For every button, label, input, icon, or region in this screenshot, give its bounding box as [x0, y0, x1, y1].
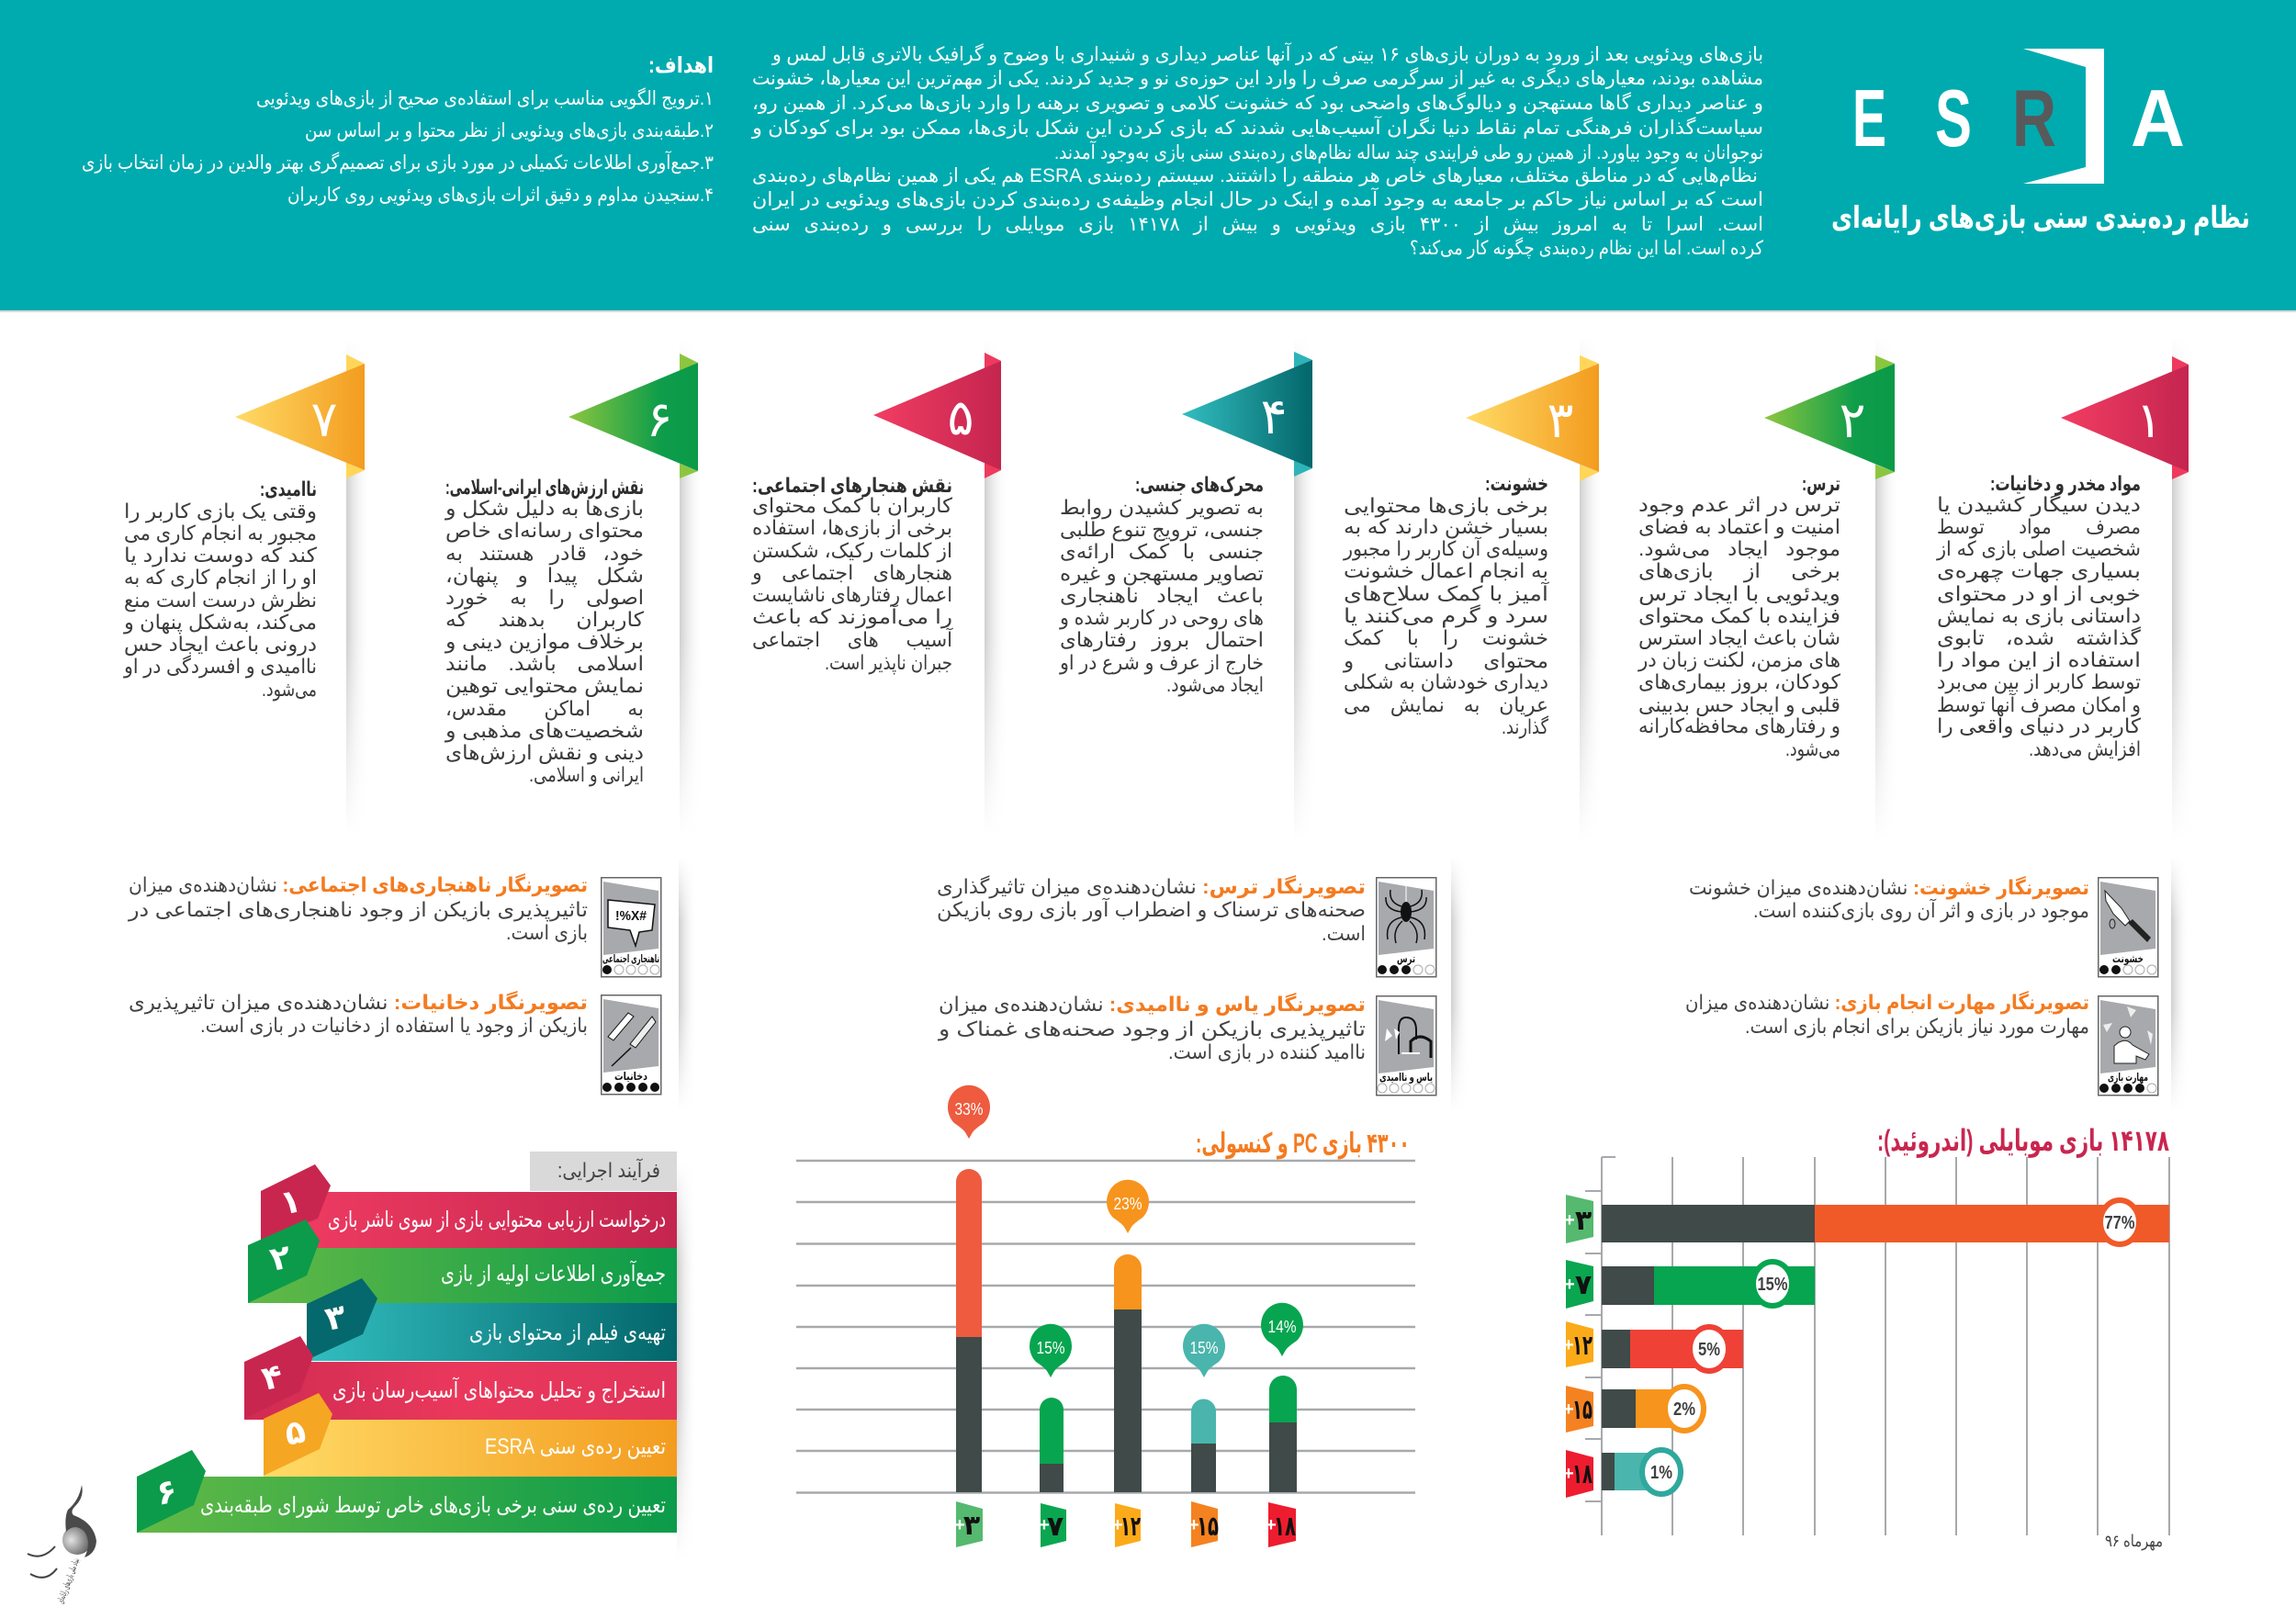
- intro paragraph: مشاهده بودند، معیارهای دیگری به غیر از سرگرمی صرف را وارد این حوزه‌ی نو و جدید کردند. یکی از مهم‌ترین این معیارها، خشونت: [752, 67, 1763, 90]
- intro paragraph: است. اسرا تا به امروز بیش از ۴۳۰۰ بازی ویدئویی و بیش از ۱۴۱۷۸ بازی موبایلی را بررسی و رده‌بندی سنی: [752, 214, 1763, 235]
- logo: ESRA: A: [2131, 73, 2185, 163]
- bar chart: mobile: 15%: [1758, 1275, 1788, 1295]
- panel: column 6 values: به اماکن مقدس،: [445, 697, 644, 721]
- panel: column 2 fear: فزاینده با کمک محتوای: [1638, 604, 1840, 627]
- bar chart: PC and console: +: [1266, 1515, 1277, 1535]
- panel: column 7 despair: نظرش درست است منع: [124, 589, 317, 612]
- panel: column 5 social norms: ۵: [947, 390, 974, 445]
- icon: violence descriptor: خشونت: [2112, 952, 2144, 966]
- panel: column 3 violence: گذارند.: [1502, 715, 1548, 738]
- icon: tobacco descriptor: [602, 995, 661, 1095]
- bar chart: PC and console: ۳: [963, 1511, 980, 1541]
- panel: column 3 violence: به انجام اعمال خشونت: [1344, 559, 1548, 582]
- intro paragraph: است که بر اساس نیاز حاکم بر جامعه به وجود آمده و اینک در حال انجام وظیفه‌ی رده‌بندی کردن بازی‌های ویدئویی در ایران: [752, 187, 1763, 211]
- panel: column 1 drugs: مواد مخدر و دخانیات:: [1990, 472, 2141, 496]
- panel: column 2 fear: امنیت و اعتماد به فضای: [1638, 515, 1840, 538]
- panel: column 1 drugs: استفاده از این مواد را: [1937, 648, 2141, 671]
- bar chart: mobile: ۷: [1575, 1270, 1592, 1300]
- panel: column 1 drugs: توسط کاربر از بین می‌برد: [1937, 670, 2141, 693]
- goals list: ۱.ترویج الگویی مناسب برای استفاده‌ی صحیح از بازی‌های ویدئویی: [256, 87, 714, 109]
- bar chart: mobile: ۱۵: [1572, 1395, 1593, 1425]
- bar chart: mobile: ۱۸: [1572, 1459, 1593, 1489]
- text: despair descriptor: [938, 992, 1366, 1063]
- bar chart: PC and console: 33%: [955, 1100, 983, 1118]
- panel: column 4 sexual stimuli: محرک‌های جنسی:: [1135, 473, 1264, 497]
- panel: column 1 drugs: خوبی از او در محتوای: [1937, 582, 2141, 605]
- panel: column 1 drugs: و امکان مصرف آنها توسط: [1937, 692, 2141, 716]
- panel: column 5 social norms: را می‌آموزند که باعث: [752, 604, 952, 628]
- logo: ESRA: R: [2012, 73, 2056, 163]
- panel: column 6 values: دینی و نقش ارزش‌های: [445, 741, 644, 765]
- panel: process steps: تعیین رده‌ی سنی ESRA: [485, 1434, 666, 1459]
- panel: process steps: ۲: [266, 1237, 294, 1278]
- icon: despair descriptor: یاس و ناامیدی: [1379, 1071, 1433, 1084]
- text: despair descriptor: ناامید کننده در بازی است.: [1168, 1040, 1366, 1063]
- goals list: اهداف:: [648, 53, 714, 78]
- panel: column 2 fear: های مزمن، لکنت زبان در: [1638, 648, 1840, 671]
- panel: column 6 values: اصولی را به خورد: [445, 586, 644, 609]
- text: despair descriptor: تصویرنگار یاس و ناامیدی: نشان‌دهنده‌ی میزان: [939, 992, 1366, 1017]
- panel: column 4 sexual stimuli: احتمال بروز رفتارهای: [1060, 628, 1264, 651]
- goals list: ۳.جمع‌آوری اطلاعات تکمیلی در مورد بازی برای تصمیم‌گری بهتر والدین در زمان انتخاب بازی: [82, 151, 714, 174]
- bar chart: PC and console: 15%: [1190, 1339, 1218, 1357]
- bar chart: mobile: ۱۲: [1572, 1331, 1593, 1361]
- logo: national games foundation: بنیاد ملی بازی‌های رایانه‌ای: [56, 1556, 82, 1605]
- panel: column 5 social norms: آسیب های اجتماعی: [752, 627, 953, 651]
- panel: descriptor divider shadows: [679, 857, 2189, 1111]
- bar chart: PC and console: +: [1188, 1515, 1199, 1535]
- text: violence descriptor: [1689, 875, 2089, 922]
- panel: column 3 violence: برخی بازی‌ها محتوایی: [1344, 494, 1548, 517]
- panel: column 2 fear: موجود ایجاد می‌شود.: [1638, 537, 1840, 560]
- intro paragraph: و عناصر دیداری گاها مستهجن و دیالوگ‌های واضحی بود که خشونت کلامی و تصویری برهنه را وارد بازی‌ها می‌کرد. از همین رو،: [752, 92, 1763, 114]
- panel: column 3 violence: آمیز با کمک سلاح‌های: [1344, 581, 1549, 605]
- bar chart: PC and console: 23%: [1113, 1195, 1142, 1213]
- panel: column 6 values: ایرانی و اسلامی.: [529, 763, 644, 786]
- panel: column 1 drugs: داستانی بازی به نمایش: [1937, 604, 2141, 628]
- panel: process steps: جمع‌آوری اطلاعات اولیه از بازی: [441, 1260, 666, 1287]
- bar chart: PC and console: +: [1112, 1515, 1123, 1535]
- panel: column 2 fear: [1638, 355, 1895, 807]
- header band: [0, 0, 2296, 312]
- icon: violence descriptor: [2099, 878, 2158, 977]
- bar chart: PC and console: +: [1039, 1515, 1050, 1535]
- bar chart: mobile: +: [1563, 1464, 1574, 1484]
- bar chart: PC and console: ۷: [1047, 1511, 1064, 1542]
- panel: column 2 fear: و رفتارهای محافظه‌کارانه: [1638, 714, 1840, 737]
- text: social norms descriptor: تصویرنگار ناهنجاری‌های اجتماعی: نشان‌دهنده‌ی میزان: [129, 872, 588, 897]
- panel: column 4 sexual stimuli: ایجاد می‌شود.: [1166, 673, 1264, 696]
- panel: column 7 despair: ناامیدی:: [260, 478, 317, 500]
- intro paragraph: بازی‌های ویدئویی بعد از ورود به دوران بازی‌های ۱۶ بیتی که در آنها عناصر دیداری و شنیداری با وضوح و گرافیک بالاتری قابل لمس و: [771, 42, 1763, 65]
- text: tobacco descriptor: [129, 990, 588, 1037]
- goals list: [82, 53, 714, 206]
- text: tobacco descriptor: بازیکن از وجود یا استفاده از دخانیات در بازی است.: [200, 1014, 588, 1037]
- bar chart: mobile: [1563, 1157, 2169, 1535]
- intro paragraph: [751, 42, 1763, 259]
- panel: column 7 despair: [123, 354, 365, 801]
- text: social norms descriptor: [128, 872, 588, 944]
- panel: column 6 values: شخصیت‌های مذهبی و: [445, 719, 644, 742]
- panel: column 2 fear: ویدئویی با ایجاد ترس: [1638, 582, 1840, 606]
- panel: process steps: ۱: [276, 1181, 304, 1222]
- panel: column 4 sexual stimuli: خارج از عرف و شرع در او: [1059, 651, 1264, 675]
- goals list: ۴.سنجیدن مداوم و دقیق اثرات بازی‌های ویدئویی روی کاربران: [287, 185, 714, 206]
- text: tobacco descriptor: تصویرنگار دخانیات: نشان‌دهنده‌ی میزان تاثیرپذیری: [129, 990, 588, 1015]
- bar chart: PC and console: ۱۸: [1274, 1511, 1296, 1542]
- panel: column 3 violence: سرد و گرم می‌کنند یا: [1344, 604, 1548, 627]
- panel: column 6 values: کاربران بدهند که: [445, 608, 645, 631]
- panel: column 3 violence: بسیار خشن دارند که به: [1344, 515, 1548, 538]
- panel: column 5 social norms: اعمال رفتارهای ناشایست: [752, 583, 952, 606]
- panel: column 6 values: بازی‌ها به دلیل شکل و: [445, 497, 644, 520]
- logo: ESRA: [1852, 49, 2185, 184]
- panel: column 6 values: نمایش محتوایی توهین: [445, 674, 644, 698]
- bar chart: PC and console: +: [954, 1515, 965, 1535]
- panel: column 2 fear: شان باعث ایجاد استرس: [1638, 626, 1840, 650]
- panel: column 4 sexual stimuli: جنسی با کمک ارائه‌ی: [1060, 540, 1264, 563]
- panel: column 4 sexual stimuli: جنسی، ترویج تنوع طلبی: [1060, 518, 1264, 541]
- panel: column 2 fear: می‌شود.: [1785, 737, 1840, 760]
- panel: column 7 despair: کند که دوست ندارد یا: [124, 544, 318, 567]
- bar chart: mobile: 5%: [1698, 1340, 1720, 1360]
- text: game skill descriptor: مهارت مورد نیاز بازیکن برای انجام بازی است.: [1745, 1015, 2089, 1038]
- logo: national games foundation: [28, 1485, 96, 1605]
- logo: ESRA: S: [1935, 73, 1972, 163]
- panel: column 7 despair: او را از انجام کاری که به: [124, 566, 317, 589]
- panel: column 6 values: اسلامی باشد. مانند: [445, 652, 644, 675]
- bar chart: PC and console: ۱۲: [1120, 1511, 1141, 1542]
- panel: column 7 despair: مجبور به انجام کاری می: [124, 522, 317, 545]
- panel: column 7 despair: درونی باعث ایجاد حس: [124, 633, 317, 657]
- panel: column 7 despair: وقتی یک بازی کاربر را: [124, 500, 317, 523]
- bar chart: PC and console: ۱۵: [1197, 1511, 1219, 1542]
- panel: column 3 violence: وسیله‌ی آن کاربر را مجبور: [1343, 536, 1548, 560]
- bar chart: mobile: +: [1563, 1335, 1574, 1355]
- panel: process steps: [137, 1152, 697, 1561]
- panel: column 2 fear: قلبی و ایجاد حس بدبینی: [1638, 693, 1840, 717]
- panel: column 5 social norms: کاربران با کمک محتوای: [752, 494, 953, 517]
- panel: column 1 drugs: مصرف مواد توسط: [1937, 515, 2141, 538]
- panel: column 3 violence: ۳: [1547, 393, 1574, 448]
- panel: process steps: تهیه‌ی فیلم از محتوای بازی: [469, 1320, 666, 1345]
- panel: column 5 social norms: از کلمات رکیک، شکستن: [752, 539, 952, 562]
- panel: column 7 despair: می‌شود.: [262, 678, 317, 701]
- panel: column 4 sexual stimuli: [1059, 352, 1312, 807]
- panel: column 7 despair: می‌کند، به‌شکل پنهان و: [123, 611, 317, 635]
- bar chart: PC and console: 15%: [1036, 1339, 1065, 1357]
- panel: column 2 fear: ترس در اثر عدم وجود: [1638, 493, 1840, 517]
- panel: column 5 social norms: هنجارهای اجتماعی و: [751, 561, 952, 584]
- icon: social norms descriptor: [602, 878, 661, 977]
- bar chart: PC and console: [796, 1085, 1415, 1547]
- panel: column 6 values: شکل پیدا و پنهان،: [445, 564, 644, 588]
- icon: tobacco descriptor: دخانیات: [614, 1070, 647, 1083]
- bar chart: mobile: +: [1564, 1275, 1575, 1295]
- panel: column 2 fear: کودکان، بروز بیماری‌های: [1638, 670, 1841, 693]
- bar chart: mobile: ۳: [1575, 1206, 1592, 1236]
- panel: column 1 drugs: دیدن سیگار کشیدن یا: [1937, 493, 2141, 516]
- panel: column 2 fear: ۲: [1839, 393, 1866, 448]
- text: game skill descriptor: [1685, 990, 2089, 1038]
- icon: game skill descriptor: [2099, 996, 2158, 1096]
- panel: column 6 values: محتوای رسانه‌ای خاص: [445, 519, 644, 543]
- panel: column 5 social norms: برخی از بازی‌ها، استفاده: [752, 516, 952, 539]
- panel: column 5 social norms: نقش هنجارهای اجتماعی:: [752, 474, 952, 497]
- bar chart: mobile: +: [1564, 1210, 1575, 1231]
- text: fear descriptor: صحنه‌های ترسناک و اضطراب آور بازی روی بازیکن: [937, 897, 1366, 921]
- goals list: ۲.طبقه‌بندی بازی‌های ویدئویی از نظر محتوا و بر اساس سن: [305, 120, 714, 141]
- bar chart: mobile: +: [1563, 1399, 1574, 1420]
- panel: column 7 despair: ۷: [310, 392, 338, 447]
- panel: column 1 drugs: ۱: [2135, 393, 2163, 448]
- icon: game skill descriptor: مهارت بازی: [2108, 1071, 2148, 1084]
- icon: fear descriptor: [1377, 878, 1436, 977]
- panel: column 1 drugs: افزایش می‌دهد.: [2029, 737, 2141, 761]
- bar chart: mobile: 2%: [1673, 1399, 1695, 1420]
- bar chart: mobile: 77%: [2105, 1213, 2135, 1233]
- icon: fear descriptor: ترس: [1397, 952, 1415, 965]
- bar chart: PC and console: 14%: [1267, 1318, 1297, 1336]
- panel: process steps: تعیین رده‌ی سنی برخی بازی‌های خاص توسط شورای طبقه‌بندی: [200, 1493, 666, 1518]
- panel: column 3 violence: عریان به نمایش می: [1344, 693, 1548, 717]
- panel: column 1 drugs: [1936, 356, 2189, 807]
- logo: ESRA: E: [1852, 73, 1886, 163]
- panel: column 4 sexual stimuli: باعث ایجاد ناهنجاری: [1060, 584, 1264, 607]
- text: social norms descriptor: بازی است.: [506, 921, 588, 944]
- heading: PC chart title: ۴۳۰۰ بازی PC و کنسولی:: [1196, 1129, 1410, 1160]
- text: violence descriptor: تصویرنگار خشونت: نشان‌دهنده‌ی میزان خشونت: [1689, 875, 2089, 900]
- intro paragraph: نظام‌هایی که در مناطق مختلف، معیارهای خاص هر منطقه را داشتند. سیستم رده‌بندی ESRA هم یکی از همین نظام‌های رده‌بندی: [752, 165, 1758, 187]
- panel: column 6 values: برخلاف موازین دینی و: [445, 630, 644, 653]
- icon: despair descriptor: [1377, 996, 1436, 1096]
- panel: column 4 sexual stimuli: های روحی در کاربر شده و: [1059, 606, 1264, 629]
- panel: column 6 values: نقش ارزش‌های ایرانی-اسلامی:: [445, 476, 644, 500]
- text: despair descriptor: تاثیرپذیری بازیکن از وجود صحنه‌های غمناک و: [938, 1017, 1366, 1041]
- panel: column 6 values: خود، قادر هستند به: [445, 542, 644, 565]
- panel: process steps: ۶: [152, 1471, 180, 1512]
- intro paragraph: سیاست‌گذاران فرهنگی تمام نقاط دنیا نگران آسیب‌هایی شدند که بازی کردن این شکل بازی‌ها، ممکن بود برای کودکان و: [751, 116, 1763, 139]
- text: social norms descriptor: تاثیرپذیری بازیکن از وجود ناهنجاری‌های اجتماعی در: [128, 898, 588, 922]
- panel: column 5 social norms: جبران ناپذیر است.: [825, 651, 952, 675]
- panel: column 3 violence: [1343, 355, 1599, 807]
- icon: social norms descriptor: ناهنجاری اجتماعی: [602, 952, 659, 965]
- heading: mobile chart title: ۱۴۱۷۸ بازی موبایلی (اندروئید):: [1877, 1124, 2169, 1158]
- text: fear descriptor: تصویرنگار ترس: نشان‌دهنده‌ی میزان تاثیرگذاری: [937, 874, 1366, 899]
- panel: column 3 violence: دیداری خودشان به شکلی: [1344, 670, 1548, 693]
- panel: column 4 sexual stimuli: به تصویر کشیدن روابط: [1060, 496, 1264, 519]
- panel: process steps: استخراج و تحلیل محتواهای آسیب‌رسان بازی: [332, 1377, 666, 1403]
- intro paragraph: نوجوانان به وجود بیاورد. از همین رو طی فرایندی چند ساله نظام‌های رده‌بندی سنی بازی به‌وجود آمدند.: [1054, 140, 1763, 163]
- panel: column 1 drugs: گذاشته شده، تابوی: [1937, 626, 2142, 649]
- panel: column 2 fear: ترس:: [1802, 472, 1840, 496]
- date note: مهرماه ۹۶: [2105, 1532, 2163, 1551]
- panel: column 1 drugs: شخصیت اصلی بازی که از: [1936, 537, 2141, 560]
- intro paragraph: کرده است. اما این نظام رده‌بندی چگونه کار می‌کند؟: [1410, 237, 1763, 259]
- text: fear descriptor: است.: [1322, 922, 1366, 945]
- panel: column 3 violence: خشونت:: [1485, 472, 1548, 496]
- panel: process steps: درخواست ارزیابی محتوایی بازی از سوی ناشر بازی: [328, 1208, 666, 1232]
- panel: column 7 despair: ناامیدی و افسردگی در او: [123, 655, 317, 678]
- panel: process steps: ۴: [258, 1356, 286, 1398]
- panel: process steps: ۵: [281, 1411, 309, 1453]
- panel: column 5 social norms: [751, 340, 1008, 836]
- panel: column 1 drugs: کاربر در دنیای واقعی را: [1937, 714, 2142, 737]
- panel: column 3 violence: محتوای داستانی و: [1343, 649, 1548, 672]
- text: violence descriptor: موجود در بازی و اثر آن روی بازی‌کننده است.: [1753, 898, 2089, 922]
- panel: column 3 violence: خشونت را با کمک: [1344, 626, 1548, 649]
- panel: process steps: فرآیند اجرایی:: [557, 1158, 660, 1182]
- panel: process steps: ۳: [321, 1297, 349, 1338]
- panel: column 1 drugs: بسیاری جهات چهره‌ی: [1937, 559, 2141, 582]
- panel: column 6 values: [445, 354, 698, 801]
- panel: column 4 sexual stimuli: ۴: [1260, 389, 1288, 444]
- panel: column 4 sexual stimuli: تصاویر مستهجن و غیره: [1060, 562, 1264, 585]
- panel: column 2 fear: برخی از بازی‌های: [1638, 559, 1840, 582]
- text: fear descriptor: [937, 874, 1366, 945]
- text: game skill descriptor: تصویرنگار مهارت انجام بازی: نشان‌دهنده‌ی میزان: [1685, 990, 2089, 1015]
- panel: column 6 values: ۶: [646, 392, 673, 447]
- icon: social norms descriptor: !%X#: [615, 908, 647, 924]
- bar chart: mobile: 1%: [1650, 1463, 1672, 1483]
